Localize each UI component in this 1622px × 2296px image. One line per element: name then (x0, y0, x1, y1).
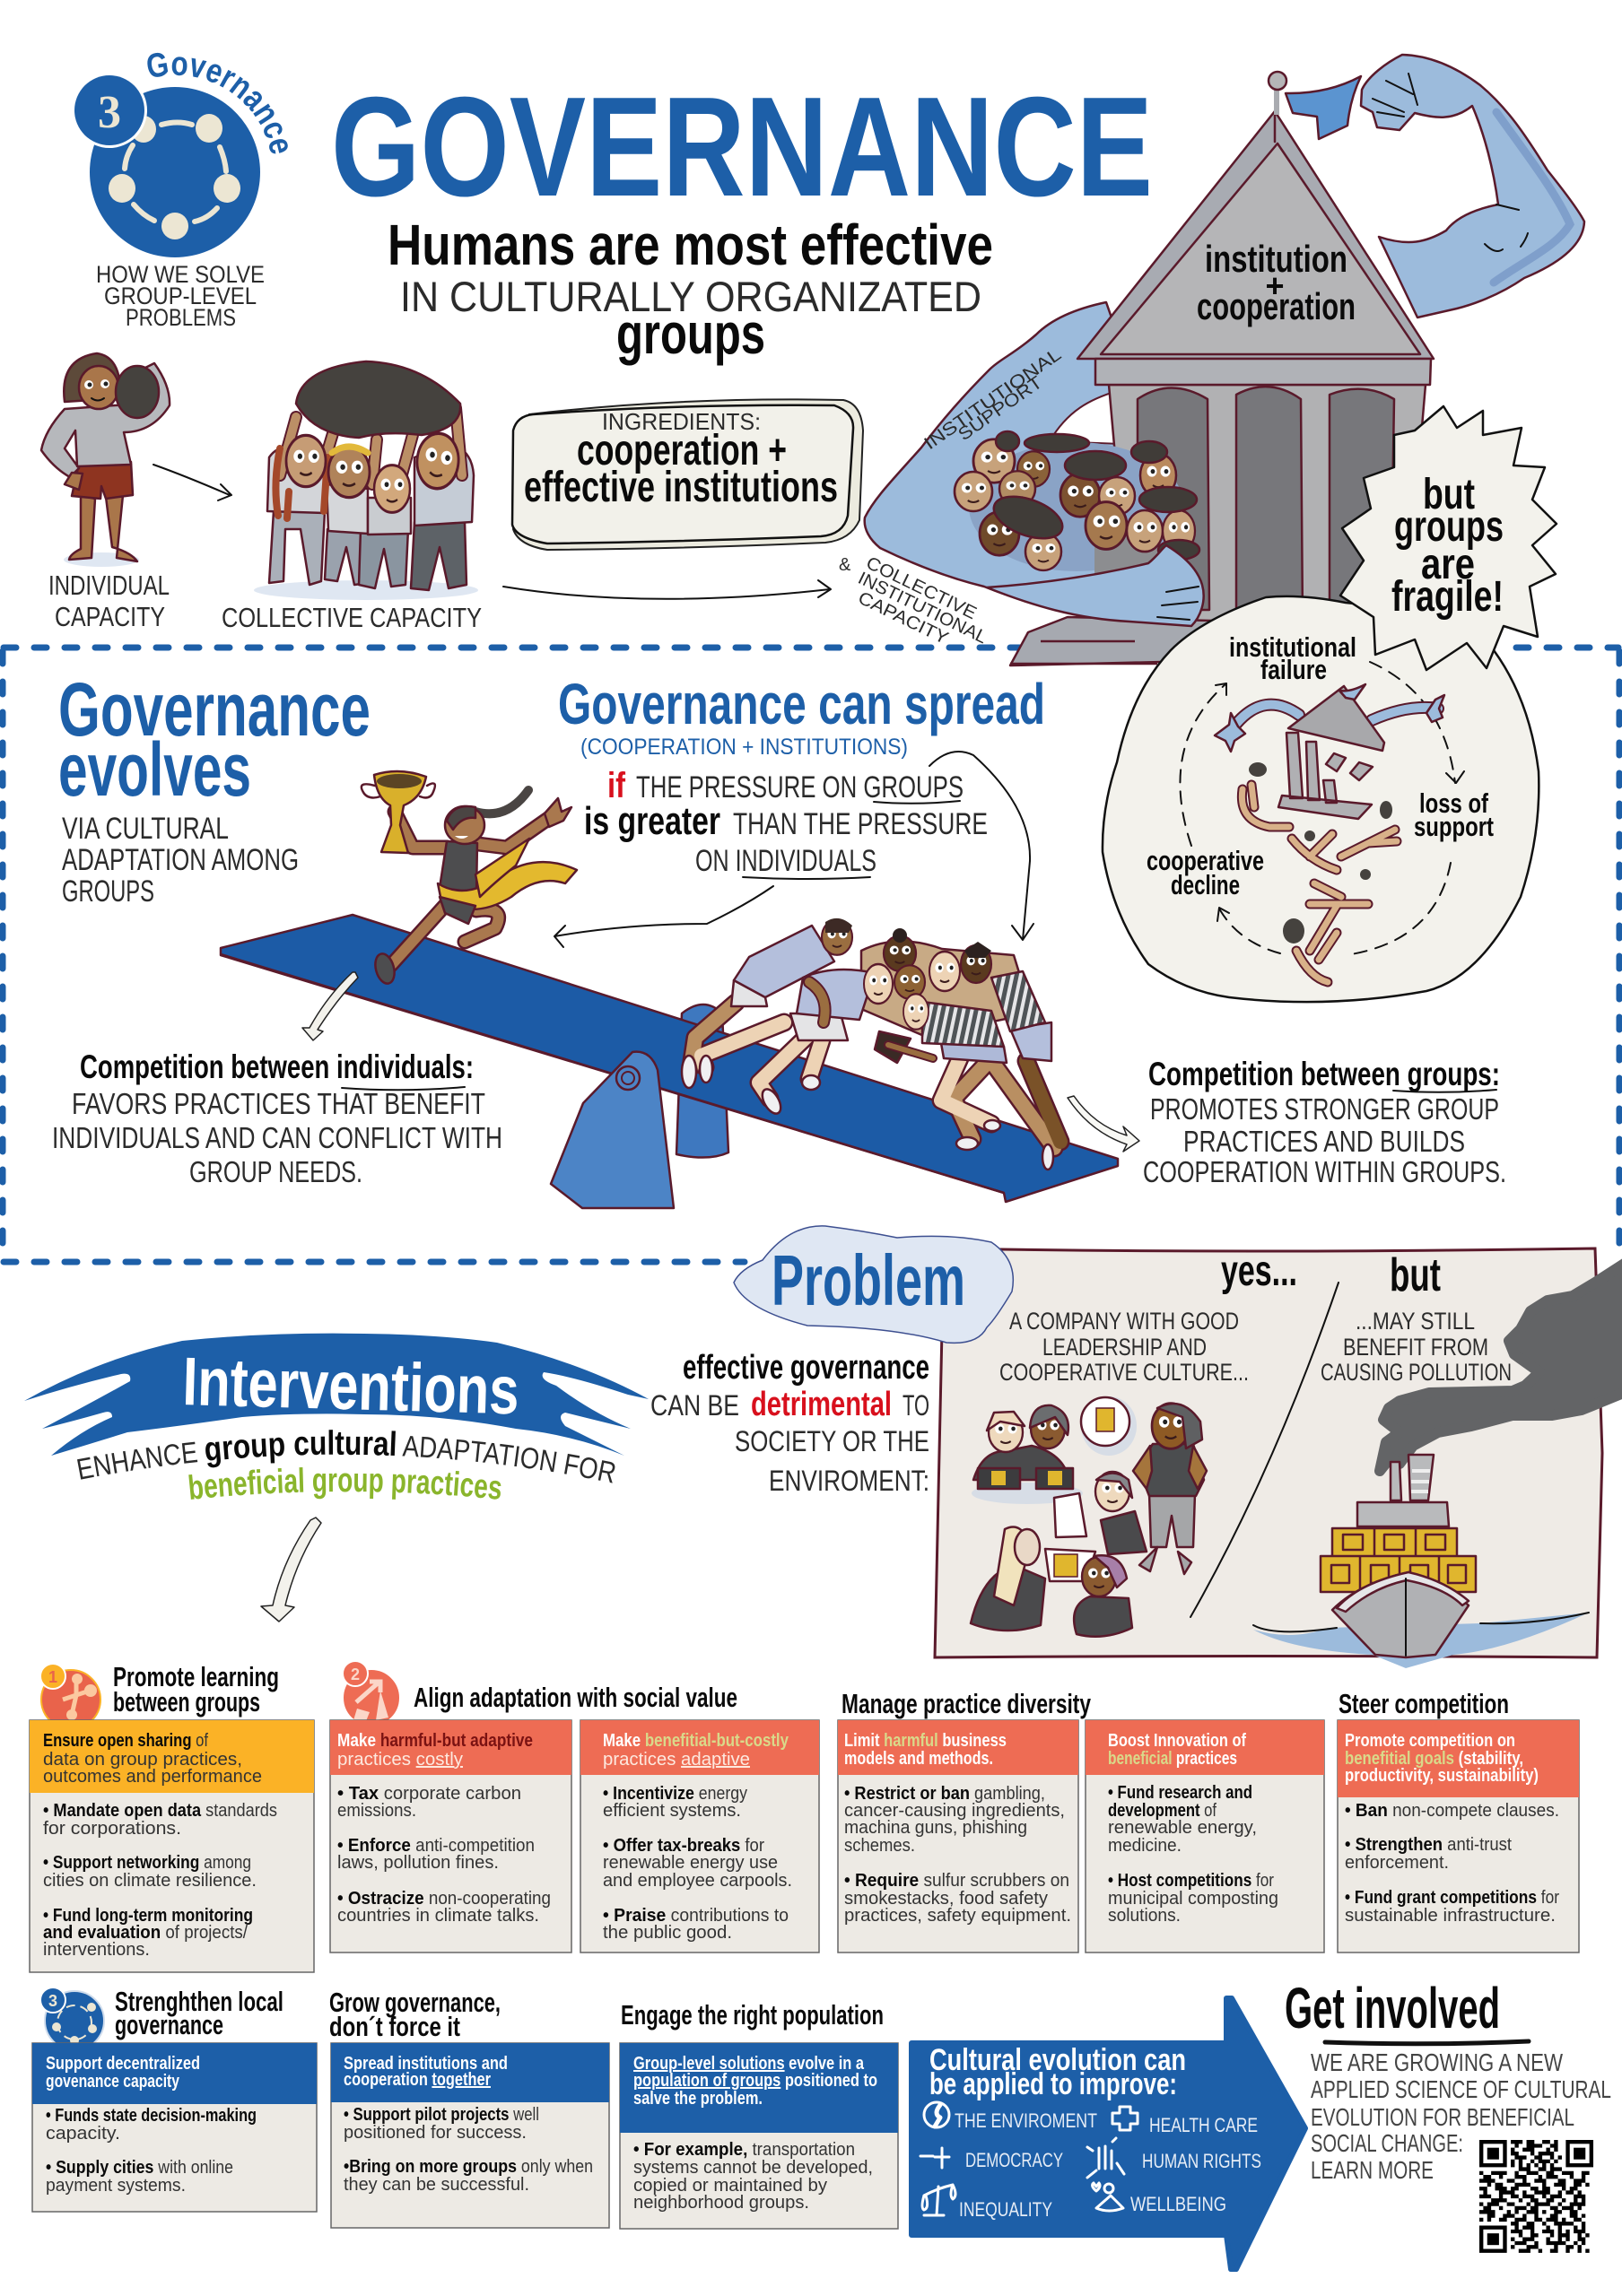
headline: Humans are most effective (388, 213, 993, 277)
card: spread institutions: •Bring on more groups only when (344, 2157, 593, 2177)
title: GOVERNANCE (331, 68, 1153, 226)
text: institutional support: SUPPORT (955, 373, 1046, 445)
heading: governance can spread: Governance can spread (558, 672, 1045, 736)
card: make harmful costly: • Tax corporate carbon (337, 1784, 521, 1804)
card: make beneficial adaptive: and employee carpools. (603, 1871, 792, 1891)
text: competition between individuals (52, 1048, 502, 1188)
heading: align adaptation with icon (343, 1661, 737, 1726)
heading: engage the right population: Engage the right population (621, 1999, 884, 2031)
text: effective governance detrimental: SOCIETY OR THE (735, 1425, 929, 1457)
application labels: THE ENVIROMENT (955, 2109, 1097, 2132)
text: institution + cooperation (1197, 238, 1356, 327)
arrow: white down to individual competition (302, 972, 358, 1040)
card: spread institutions: cooperation together (344, 2070, 491, 2090)
callout: ingredients: effective institutions (524, 464, 838, 511)
card: support decentralized: Support decentralized (46, 2054, 200, 2074)
text: institutional support: INSTITUTIONAL (920, 344, 1065, 454)
dashed section border (3, 648, 1619, 1262)
arrow panel: cultural evolution applications (911, 1998, 1305, 2269)
text: cooperative decline (1147, 845, 1264, 900)
icon: team in office (971, 1396, 1207, 1637)
text: institution + cooperation: + (1265, 267, 1285, 304)
icon: ship (1253, 1455, 1589, 1668)
card: group-level solutions: copied or maintained by (633, 2176, 827, 2196)
text: competition between groups (1143, 1056, 1506, 1188)
text: institution + cooperation: cooperation (1197, 285, 1356, 327)
text: pollution caption: CAUSING POLLUTION (1321, 1359, 1512, 1386)
card: limit harmful: machina guns, phishing (844, 1818, 1027, 1838)
banner: interventions: Interventions (182, 1344, 520, 1429)
illustration: institution building with arms (865, 55, 1584, 665)
text: collective institutional capacity: INSTITUTIONAL (855, 569, 990, 648)
card: make harmful costly (330, 1720, 571, 1952)
text: loss of support: loss of (1419, 787, 1489, 819)
text: how we solve group-level problems (96, 261, 265, 331)
card: boost innovation: renewable energy, (1108, 1818, 1257, 1838)
card: ensure open sharing: Ensure open sharing of (43, 1731, 208, 1751)
heading: promote learning with icon (40, 1661, 279, 1729)
heading: align adaptation with icon: Align adaptation with social value (414, 1682, 737, 1713)
text: but: but (1390, 1249, 1441, 1301)
text: pressure condition (584, 766, 988, 879)
card: boost innovation: development of (1108, 1801, 1216, 1821)
card: ensure open sharing: data on group practices, (43, 1750, 242, 1770)
callout: but groups are fragile (1340, 406, 1557, 670)
card: support decentralized: capacity. (46, 2124, 120, 2144)
card: spread institutions: positioned for success. (344, 2123, 527, 2143)
card: group-level solutions: Group-level solutions evolve in a (633, 2054, 865, 2074)
text: individual capacity: INDIVIDUAL (48, 570, 170, 601)
heading: strengthen local governance with icon: 3 (48, 1992, 57, 2010)
text: competition between groups: Competition between groups: (1148, 1056, 1500, 1092)
card: limit harmful: smokestacks, food safety (844, 1889, 1048, 1909)
card: make harmful costly: • Enforce anti-competition (337, 1836, 535, 1856)
card: ensure open sharing: cities on climate resilience. (43, 1871, 257, 1891)
text: get involved description: WE ARE GROWING A NEW (1311, 2048, 1563, 2076)
text: effective governance detrimental (650, 1349, 929, 1497)
text: how we solve group-level problems: GROUP-LEVEL (104, 283, 257, 309)
card: boost innovation: solutions. (1108, 1906, 1181, 1926)
headline: groups (616, 301, 765, 366)
card: support decentralized: payment systems. (46, 2176, 186, 2196)
card: make beneficial adaptive: • Offer tax-breaks for (603, 1836, 764, 1856)
card: group-level solutions: • For example, transportation (633, 2140, 855, 2160)
forearm hand (987, 545, 1204, 626)
card: ensure open sharing (30, 1720, 314, 1972)
card: boost innovation: • Host competitions for (1108, 1871, 1274, 1891)
callout: problem cloud: Problem (772, 1240, 965, 1320)
card: promote competition: • Ban non-compete clauses. (1345, 1801, 1559, 1821)
banner: interventions (24, 1334, 649, 1456)
icon: smoke (1380, 1263, 1622, 1471)
card: support decentralized (32, 2043, 317, 2212)
callout: but groups are fragile: fragile! (1391, 573, 1504, 621)
text: pollution caption: BENEFIT FROM (1343, 1334, 1488, 1361)
card: limit harmful: schemes. (844, 1836, 915, 1856)
card: group-level solutions: salve the problem. (633, 2089, 763, 2109)
card: make harmful costly: emissions. (337, 1801, 416, 1821)
heading: governance can spread (558, 672, 1045, 760)
group of people (955, 431, 1199, 590)
heading: grow governance: don´t force it (329, 2011, 460, 2042)
card: limit harmful: • Restrict or ban gambling, (844, 1784, 1045, 1804)
card: boost innovation: municipal composting (1108, 1889, 1278, 1909)
arrow: collective to institutional (503, 580, 831, 599)
illustration: seesaw (221, 915, 1118, 1208)
text: pressure condition: is greater (584, 799, 720, 843)
text: pressure condition: ON INDIVIDUALS (695, 844, 876, 878)
text: effective governance detrimental: effective governance (683, 1349, 929, 1387)
text: via cultural adaptation: ADAPTATION AMONG (62, 843, 299, 877)
text: company caption: LEADERSHIP AND (1042, 1334, 1207, 1361)
text: competition between groups: PRACTICES AND BUILDS (1183, 1125, 1465, 1158)
card: promote competition: productivity, sustainability) (1345, 1766, 1539, 1786)
callout: ingredients: INGREDIENTS: (602, 408, 761, 435)
text: competition between individuals: Competition between individuals: (80, 1048, 474, 1085)
card: make harmful costly: • Ostracize non-cooperating (337, 1889, 551, 1909)
heading: manage practice diversity: Manage practice diversity (842, 1688, 1092, 1719)
card: group-level solutions: population of groups positioned to (633, 2071, 877, 2091)
card: ensure open sharing: for corporations. (43, 1819, 181, 1839)
application labels: WELLBEING (1130, 2193, 1226, 2215)
illustration: runner with trophy (362, 771, 577, 986)
text: loss of support: support (1414, 811, 1494, 842)
text: get involved description: SOCIAL CHANGE: (1311, 2129, 1463, 2157)
panel: fragile cycle blob (1103, 596, 1539, 1002)
card: ensure open sharing: outcomes and performance (43, 1767, 262, 1787)
heading: governance can spread: (COOPERATION + INSTITUTIONS) (580, 735, 908, 760)
callout: problem cloud (734, 1226, 1013, 1343)
card: ensure open sharing: interventions. (43, 1940, 150, 1960)
text: collective institutional capacity: CAPACITY (855, 588, 951, 648)
card: make beneficial adaptive: • Incentivize energy (603, 1784, 747, 1804)
text: loss of support (1414, 787, 1494, 842)
icon: collapsing building (1215, 684, 1444, 819)
icon: collective lifting rock (254, 361, 478, 600)
building steps (1010, 617, 1274, 665)
arrow: hollow to group competition (1068, 1096, 1139, 1152)
card: support decentralized: • Funds state decision-making (46, 2106, 257, 2126)
card: limit harmful: practices, safety equipment. (844, 1906, 1071, 1926)
arrow: individual to collective (153, 465, 231, 500)
icons: falling people and rocks (1242, 762, 1397, 982)
plank (221, 915, 1118, 1202)
application labels (955, 2109, 1261, 2221)
card: group-level solutions: systems cannot be developed, (633, 2158, 873, 2178)
text: cooperative decline: cooperative (1147, 845, 1264, 876)
heading: promote learning with icon: between groups (113, 1686, 260, 1718)
arrow: to group (929, 752, 1033, 940)
headline: IN CULTURALLY ORGANIZATED (400, 273, 981, 320)
card: promote competition: benefitial goals (stability, (1345, 1749, 1523, 1769)
building roof (1077, 111, 1434, 359)
panel: problem comic (935, 1248, 1622, 1668)
card: make beneficial adaptive (580, 1720, 819, 1952)
text: competition between individuals: GROUP NEEDS. (189, 1155, 362, 1188)
text: competition between individuals: FAVORS PRACTICES THAT BENEFIT (72, 1087, 485, 1120)
text: via cultural adaptation (62, 812, 299, 909)
application icons (920, 2102, 1138, 2215)
card: support decentralized: govenance capacity (46, 2072, 180, 2092)
heading: governance evolves: Governance (58, 667, 371, 752)
card: promote competition (1338, 1720, 1579, 1952)
text: how we solve group-level problems: PROBLEMS (126, 304, 236, 331)
text: collective institutional capacity: COLLECTIVE (863, 553, 980, 623)
heading: strengthen local governance with icon (40, 1986, 283, 2050)
application labels: HEALTH CARE (1149, 2114, 1258, 2136)
card: make beneficial adaptive: practices adaptive (603, 1750, 750, 1770)
text: company caption (999, 1308, 1249, 1386)
badge: governance: Governance (147, 52, 288, 154)
headline (388, 213, 993, 366)
text: get involved description: LEARN MORE (1311, 2156, 1434, 2184)
card: limit harmful (838, 1720, 1078, 1952)
text: individual capacity: CAPACITY (55, 601, 165, 632)
text: collective institutional capacity: & (839, 555, 851, 575)
heading: grow governance (329, 1987, 501, 2042)
heading: get involved: Get involved (1285, 1976, 1500, 2040)
icon: flexing right arm (1361, 55, 1584, 317)
card: make beneficial adaptive: Make benefitial-but-costly (603, 1731, 789, 1751)
arrow: interventions to cards (261, 1518, 321, 1622)
heading: governance evolves: evolves (58, 727, 251, 812)
arrow panel: cultural evolution applications: be applied to improve: (929, 2067, 1177, 2101)
card: promote competition: • Fund grant competitions for (1345, 1888, 1559, 1908)
text: beneficial group practices: beneficial group practices (188, 1467, 501, 1500)
card: limit harmful: cancer-causing ingredients, (844, 1801, 1065, 1821)
card: promote competition: Promote competition on (1345, 1731, 1515, 1751)
card: promote competition: • Strengthen anti-trust (1345, 1835, 1512, 1855)
arrow panel: cultural evolution applications: Cultural evolution can (929, 2043, 1186, 2077)
text: cooperative decline: decline (1171, 869, 1240, 900)
text: competition between groups: PROMOTES STRONGER GROUP (1150, 1092, 1499, 1126)
text: yes: yes... (1221, 1248, 1297, 1295)
text: pressure condition: if (607, 766, 626, 805)
heading: strengthen local governance with icon: Strenghthen local (115, 1986, 283, 2017)
text: pollution caption: ...MAY STILL (1356, 1308, 1475, 1335)
icon: qr code (1479, 2140, 1593, 2253)
card: make harmful costly: Make harmful-but adaptive (337, 1731, 533, 1751)
callout: but groups are fragile: but (1423, 471, 1475, 518)
application labels: HUMAN RIGHTS (1142, 2150, 1261, 2172)
text: effective governance detrimental: ENVIROMENT: (769, 1465, 929, 1497)
text: institutional failure: failure (1260, 654, 1327, 685)
heading: governance evolves (58, 667, 371, 812)
text: institutional failure: institutional (1229, 631, 1356, 663)
badge: governance: 3 (98, 87, 121, 138)
icon: flag (1286, 76, 1361, 139)
badge: governance (74, 52, 288, 257)
heading: align adaptation with icon: 2 (351, 1665, 360, 1683)
card: ensure open sharing: and evaluation of projects/ (43, 1923, 248, 1943)
text: pressure condition: THAN THE PRESSURE (733, 807, 988, 841)
text: institution + cooperation: institution (1205, 238, 1347, 280)
text: via cultural adaptation: VIA CULTURAL (62, 812, 229, 846)
text: how we solve group-level problems: HOW WE SOLVE (96, 261, 265, 288)
card: boost innovation: Boost Innovation of (1108, 1731, 1246, 1751)
callout: but groups are fragile: are (1421, 541, 1475, 588)
card: make harmful costly: practices costly (337, 1750, 463, 1770)
application labels: DEMOCRACY (965, 2149, 1063, 2171)
card: spread institutions: • Support pilot projects well (344, 2105, 539, 2125)
card: boost innovation: • Fund research and (1108, 1783, 1252, 1803)
text: pollution caption (1321, 1308, 1512, 1386)
heading: promote learning with icon: 1 (48, 1668, 57, 1686)
text: company caption: COOPERATIVE CULTURE... (999, 1359, 1249, 1386)
card: make beneficial adaptive: • Praise contributions to (603, 1906, 789, 1926)
card: ensure open sharing: • Fund long-term monitoring (43, 1906, 253, 1926)
card: spread institutions: Spread institutions and (344, 2054, 508, 2074)
heading: strengthen local governance with icon: governance (115, 2009, 223, 2040)
card: make beneficial adaptive: renewable energy use (603, 1853, 778, 1873)
card: spread institutions (331, 2043, 609, 2228)
card: make harmful costly: laws, pollution fines. (337, 1853, 499, 1873)
card: support decentralized: • Supply cities with online (46, 2158, 233, 2178)
card: limit harmful: models and methods. (844, 1749, 993, 1769)
card: make beneficial adaptive: the public good. (603, 1923, 732, 1943)
card: make beneficial adaptive: efficient systems. (603, 1801, 741, 1821)
icon: individual with rock (41, 353, 170, 567)
text: collective institutional capacity (839, 553, 990, 648)
text: pressure condition: THE PRESSURE ON GROUPS (636, 770, 964, 804)
building columns (1109, 385, 1426, 628)
card: boost innovation: medicine. (1108, 1836, 1182, 1856)
callout: ingredients: cooperation + (577, 427, 787, 474)
text: competition between individuals: INDIVIDUALS AND CAN CONFLICT WITH (52, 1121, 502, 1154)
heading: promote learning with icon: Promote learning (113, 1661, 279, 1692)
card: limit harmful: • Require sulfur scrubbers on (844, 1871, 1069, 1891)
heading: steer competition: Steer competition (1339, 1688, 1509, 1719)
card: promote competition: enforcement. (1345, 1853, 1449, 1873)
card: boost innovation: beneficial practices (1108, 1749, 1237, 1769)
arrow: to individual (554, 886, 773, 947)
card: promote competition: sustainable infrastructure. (1345, 1906, 1556, 1926)
text: effective governance detrimental: CAN BE (650, 1389, 739, 1422)
text: enhance group cultural adaptation: ENHANCE group cultural ADAPTATION FOR (77, 1430, 615, 1483)
text: via cultural adaptation: GROUPS (62, 874, 154, 909)
icon: hugging left arm (865, 302, 1204, 627)
card: group-level solutions (620, 2043, 898, 2229)
card: ensure open sharing: • Mandate open data standards (43, 1801, 277, 1821)
divider line (1190, 1283, 1339, 1617)
card: make harmful costly: countries in climate talks. (337, 1906, 539, 1926)
callout: but groups are fragile: groups (1394, 503, 1504, 551)
card: boost innovation (1086, 1720, 1324, 1952)
card: spread institutions: they can be successful. (344, 2175, 529, 2195)
text: collective capacity: COLLECTIVE CAPACITY (222, 602, 482, 633)
card: ensure open sharing: • Support networking among (43, 1853, 251, 1873)
illustration: group pushing down seesaw (682, 918, 1060, 1170)
card: limit harmful: Limit harmful business (844, 1731, 1007, 1751)
text: effective governance detrimental: detrimental (751, 1386, 892, 1423)
text: individual capacity (48, 570, 170, 632)
text: company caption: A COMPANY WITH GOOD (1009, 1308, 1239, 1335)
text: institutional failure (1229, 631, 1356, 685)
card: group-level solutions: neighborhood groups. (633, 2193, 809, 2213)
front pillar (551, 1052, 674, 1208)
callout: ingredients (512, 399, 863, 550)
text: effective governance detrimental: TO (903, 1389, 929, 1422)
back pillar (676, 1004, 728, 1158)
heading: grow governance: Grow governance, (329, 1987, 501, 2018)
text: get involved description (1311, 2048, 1611, 2184)
cycle dashed arrows (1180, 662, 1455, 955)
text: competition between groups: COOPERATION WITHIN GROUPS. (1143, 1155, 1506, 1188)
application labels: INEQUALITY (959, 2198, 1052, 2221)
